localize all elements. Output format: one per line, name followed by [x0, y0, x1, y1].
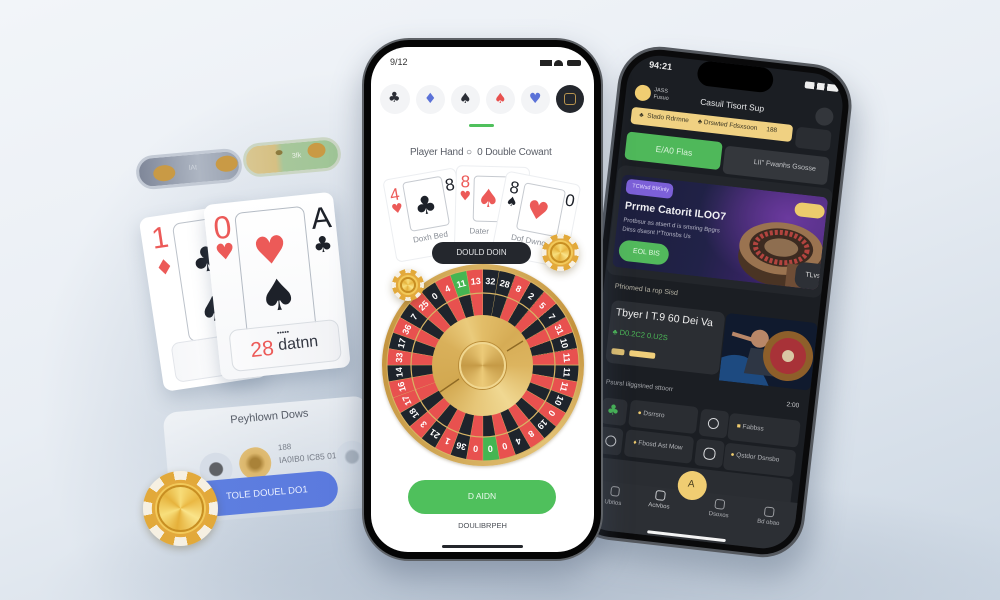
bottom navigation	[566, 477, 806, 562]
suit: small heart: ♥	[214, 239, 236, 266]
tile label: ● Dsrrsro	[637, 409, 664, 419]
footer dots: •••••	[277, 329, 290, 337]
wheel numbers and dividers: 7	[408, 312, 419, 322]
banner backing panel	[822, 213, 830, 288]
suit: club: ♣	[189, 238, 225, 282]
chip coin centre	[157, 485, 204, 532]
hero banner	[612, 174, 828, 290]
wheel numbers and dividers: 11	[558, 381, 570, 393]
wheel numbers and dividers: 1	[443, 436, 452, 447]
capsule: gold and green: 3fk	[292, 152, 302, 160]
nav icon	[610, 486, 620, 497]
round token: pale	[335, 439, 369, 474]
card frame	[516, 182, 566, 237]
tile label: ● Qstdor Dsnsbo	[730, 451, 779, 464]
pill label: DOULD DOIN	[456, 248, 507, 257]
wheel numbers and dividers: 28	[498, 278, 511, 290]
tag	[611, 348, 624, 355]
section label: Psursl Iilggsined sttoorr	[605, 379, 673, 393]
button: blue action	[188, 470, 339, 518]
grid tile: text	[623, 429, 694, 464]
wheel numbers and dividers: 36	[400, 323, 413, 336]
nav icon	[763, 506, 774, 517]
suit: spade: ♠	[504, 194, 519, 211]
wheel numbers and dividers: 21	[428, 427, 441, 441]
suit: heart: ♥	[459, 189, 471, 204]
status icons	[804, 81, 839, 92]
chip coin	[550, 242, 571, 263]
card rank: 8	[460, 172, 470, 191]
nav item: Bd obao	[756, 519, 779, 527]
wheel numbers and dividers: 18	[407, 406, 421, 420]
button label: EOL BIS	[632, 248, 660, 258]
promo text: ♣ Stado Rdrmne ♣ Drswted Fdsxsoon 188	[638, 112, 777, 134]
wheel numbers and dividers: 32	[485, 276, 495, 287]
small dark button	[794, 127, 831, 151]
button glyph: A	[687, 479, 695, 490]
grid tile: text	[628, 400, 698, 434]
suit: large heart: ♠	[477, 183, 500, 213]
grid tile: icon clover	[603, 398, 628, 426]
phone: left white app	[362, 38, 603, 561]
phone screen	[600, 56, 842, 548]
glyph: red spade: ♠	[494, 91, 507, 107]
time label: 2:00	[786, 401, 799, 410]
glyph: blue diamond: ♦	[424, 91, 437, 107]
wheel numbers and dividers: 19	[535, 417, 549, 431]
tag	[625, 179, 673, 199]
icon: ring	[707, 417, 719, 430]
wheel numbers and dividers: 8	[526, 428, 536, 439]
nav item: Actvbos	[647, 502, 669, 511]
wheel gold cone	[432, 314, 533, 416]
grid tile: text	[727, 413, 800, 448]
button label: D AIDN	[468, 491, 496, 501]
grid tile: icon	[596, 426, 623, 456]
icon: clover: ♣	[605, 402, 620, 419]
suit: club: ♣	[412, 189, 439, 222]
wheel numbers and dividers: 11	[561, 367, 572, 377]
pill text: TLvs	[804, 271, 820, 280]
dark button	[722, 146, 829, 185]
app title: Casuil Tisort Sup	[699, 96, 764, 114]
card rank: 4	[388, 184, 401, 205]
capsule: grey with gold nuggets	[135, 147, 243, 191]
card rank ace: A	[310, 201, 333, 236]
phone screen	[362, 38, 603, 561]
wheel numbers and dividers: 4	[514, 436, 523, 447]
card footer: Doxh Bed	[412, 230, 448, 245]
category icon 2	[416, 85, 445, 114]
green button	[624, 131, 722, 170]
home indicator	[442, 545, 523, 548]
wheel numbers and dividers: 36	[455, 440, 467, 452]
capsule: grey with gold nuggets: lAt	[189, 164, 197, 172]
player headline: Tbyer I T.9 60 Dei Va	[615, 306, 713, 329]
nav icon	[654, 490, 665, 501]
glyph: gold box	[564, 93, 576, 105]
card footer box	[228, 319, 342, 372]
yellow chip	[794, 202, 825, 218]
wheel needle	[440, 340, 524, 392]
card rank: 1	[149, 221, 171, 256]
outer number ring	[387, 269, 579, 461]
chip coin	[400, 277, 416, 293]
card inner frame	[172, 214, 259, 343]
player stat: ♣ D0.2C2 0.U2S	[612, 327, 668, 342]
card suit: diamond: ♦	[153, 254, 176, 281]
button label: LII" Fwanhs Gsosse	[753, 159, 816, 173]
card rank: 8	[508, 177, 521, 198]
home indicator	[647, 530, 725, 542]
stat text: 188	[278, 442, 292, 452]
wheel numbers and dividers: 5	[537, 300, 547, 311]
wheel numbers and dividers: 33	[394, 352, 404, 363]
nav item: Dsoxos	[708, 511, 728, 519]
capsule: gold and green	[242, 136, 342, 178]
double down pill	[432, 242, 531, 264]
poker chip: right	[542, 234, 579, 271]
avatar label	[654, 88, 668, 100]
wheel numbers and dividers: 25	[416, 299, 430, 313]
stat text: IA0IB0 IC85 01	[279, 450, 337, 465]
wheel numbers and dividers: 0	[487, 443, 493, 454]
wheel numbers and dividers: 11	[455, 278, 467, 290]
wheel numbers and dividers: 3	[418, 419, 429, 430]
wheel numbers and dividers: 14	[394, 367, 404, 378]
banner copy: Protbsur as atsert d is srtsring Bpgrs	[622, 218, 720, 234]
wheel numbers and dividers	[386, 269, 580, 461]
button label: TOLE DOUEL DO1	[226, 484, 308, 502]
wheel numbers and dividers: 11	[561, 353, 572, 363]
card rank: 0	[563, 190, 576, 210]
green tab indicator	[469, 124, 494, 126]
card footer box	[170, 331, 257, 383]
wheel numbers and dividers: 16	[395, 381, 408, 393]
panel: bottom-left payout card	[163, 395, 376, 525]
wheel numbers and dividers: 13	[470, 276, 481, 287]
glyph: spade: ♠	[459, 91, 472, 107]
icon: ring	[604, 435, 616, 447]
phone: right dark app	[566, 42, 855, 562]
panel heading: Peyhlown Dows	[230, 407, 309, 426]
tag text: TCWsd BIKinly	[631, 183, 669, 193]
category icon 4	[486, 85, 515, 114]
wheel numbers and dividers: 0	[501, 441, 508, 452]
roulette wheel	[380, 264, 586, 469]
floating action button	[676, 469, 708, 502]
card frame	[402, 176, 450, 232]
wheel numbers and dividers: 31	[552, 323, 565, 336]
card frame	[473, 175, 520, 222]
round token: dark nugget	[198, 451, 234, 487]
category icon 3	[451, 85, 480, 114]
card rank: 0	[212, 209, 233, 246]
glyph: blue heart: ♥	[529, 91, 542, 107]
poker chip: left small	[392, 269, 424, 301]
status time: 94:21	[648, 59, 672, 72]
dealer illustration	[719, 314, 817, 390]
section label: Pfriomed Ia rop Sisd	[614, 283, 678, 297]
wheel numbers and dividers: 10	[552, 394, 565, 407]
card footer: Dater	[469, 226, 489, 235]
suit: spade: ♠	[196, 288, 232, 332]
suit: large spade: ♠	[257, 269, 300, 323]
wheel numbers and dividers: 7	[546, 312, 557, 322]
player card	[605, 300, 725, 375]
status time: 9/12	[390, 57, 408, 67]
hand heading: Player Hand ○ 0 Double Cowant	[410, 147, 552, 158]
wheel numbers and dividers: 17	[395, 337, 408, 349]
hand card 1	[382, 167, 469, 263]
suit: large heart: ♥	[251, 227, 290, 274]
banner copy: Ditss dsasnt I*Ttonsbs Us	[621, 226, 690, 240]
banner green button	[617, 239, 669, 266]
dynamic island	[698, 62, 774, 92]
poker chip: large gold	[143, 471, 218, 546]
avatar label: JASS	[653, 87, 668, 95]
grid tile: text	[722, 443, 796, 477]
hand card 2	[454, 165, 530, 251]
wide tile	[591, 457, 793, 509]
wheel numbers and dividers: 4	[443, 283, 452, 294]
category icon 6 active	[556, 85, 584, 113]
category icon 5	[521, 85, 550, 114]
card rank: 8	[443, 175, 456, 195]
yellow promo bar	[630, 107, 793, 142]
button label: E/A0 Flas	[655, 144, 692, 158]
round icon button	[816, 108, 834, 126]
avatar	[634, 84, 651, 101]
tile label: ■ Fabbss	[736, 423, 764, 433]
gold rim	[382, 264, 584, 466]
tag	[629, 350, 655, 359]
footer score: 28	[249, 337, 275, 362]
wheel numbers and dividers: 10	[558, 337, 570, 349]
category icon 1	[380, 84, 410, 114]
nav icon	[714, 499, 725, 510]
suit: heart: ♥	[524, 194, 552, 227]
suit: small club: ♣	[312, 232, 334, 259]
playing card: front	[203, 192, 351, 380]
status: wifi	[554, 60, 563, 66]
grid tile: icon	[694, 438, 724, 468]
card inner frame	[234, 206, 317, 337]
icon: ring	[702, 447, 716, 460]
caption: DOULIBRPEH	[458, 521, 507, 530]
round token: gold crown	[238, 446, 273, 481]
inner pocket ring	[411, 293, 555, 437]
card footer: Dof Dwno	[510, 232, 547, 248]
tile label: ♦ Fbosd Ast Mow	[632, 439, 682, 452]
banner roulette illustration	[738, 222, 822, 290]
wheel numbers and dividers: 8	[514, 283, 523, 294]
status: battery	[567, 60, 581, 66]
status: signal	[540, 60, 552, 66]
suit: heart: ♥	[390, 201, 404, 218]
playing card: back	[139, 203, 268, 392]
avatar label: Fusuo	[653, 94, 669, 102]
footer label: datnn	[277, 333, 319, 354]
hand card 3	[491, 170, 581, 268]
grid tile: icon	[698, 409, 729, 439]
green spin button	[408, 480, 556, 514]
glyph: clover: ♣	[388, 90, 401, 106]
wheel numbers and dividers: 17	[400, 394, 413, 407]
wheel numbers and dividers: 0	[430, 291, 439, 302]
wheel numbers and dividers: 0	[472, 443, 478, 454]
wheel hub	[459, 342, 506, 388]
dark pill label	[794, 262, 820, 290]
wheel numbers and dividers: 0	[546, 408, 557, 418]
banner headline: Prrme Catorit ILOO7	[624, 200, 726, 223]
wheel numbers and dividers: 2	[526, 291, 536, 302]
nav item: Ubtios	[603, 499, 621, 507]
